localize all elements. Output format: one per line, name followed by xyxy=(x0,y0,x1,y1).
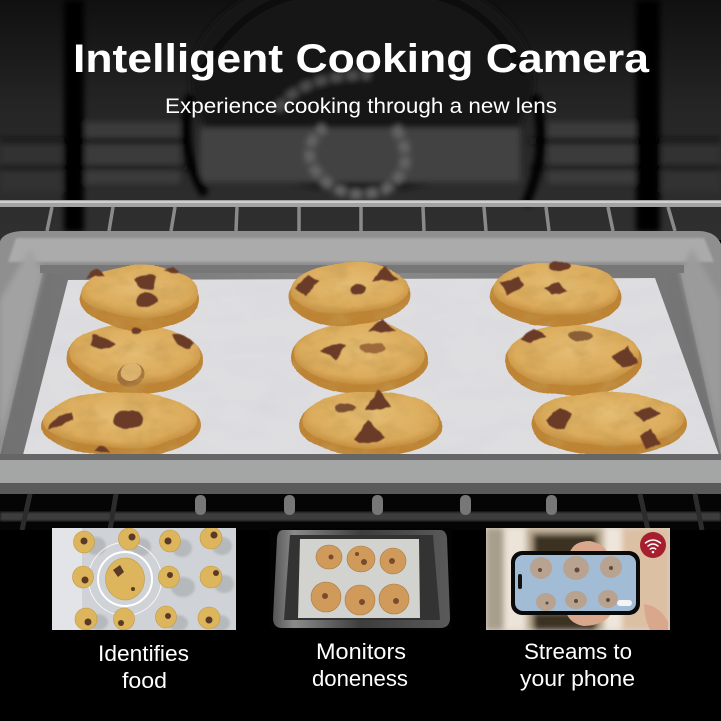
label: identifies food: food xyxy=(122,668,167,693)
label: monitors doneness: doneness xyxy=(312,666,408,691)
cookies: right column xyxy=(490,262,687,456)
chocolate chips xyxy=(48,266,195,452)
oven rack with tines xyxy=(0,200,721,231)
thumbnail: streams to phone xyxy=(486,528,670,630)
oven interior background xyxy=(0,0,721,530)
hands xyxy=(566,541,668,630)
cookies: left column xyxy=(43,266,202,458)
small parchment xyxy=(298,539,420,618)
wifi badge xyxy=(640,532,666,558)
food identification rings xyxy=(88,542,162,616)
chocolate chips xyxy=(500,262,661,450)
label: identifies food xyxy=(98,641,189,693)
cookies: middle column xyxy=(288,263,443,456)
small tray xyxy=(273,530,450,628)
label: monitors doneness: Monitors xyxy=(316,639,406,664)
tray floor xyxy=(0,270,721,456)
tray front lip xyxy=(0,454,721,494)
phone xyxy=(511,551,640,615)
subtitle: Experience cooking through a new lens xyxy=(165,95,557,118)
chocolate chips xyxy=(295,266,399,443)
label: streams to your phone: your phone xyxy=(520,666,635,691)
label: identifies food: Identifies xyxy=(98,641,189,666)
title: Intelligent Cooking Camera xyxy=(73,37,650,81)
label: streams to your phone: Streams to xyxy=(524,639,632,664)
thumbnail: identifies food xyxy=(52,527,236,631)
lower rack xyxy=(0,494,721,721)
parchment paper xyxy=(23,278,719,455)
thumbnail: monitors doneness xyxy=(270,528,452,630)
label: streams to your phone xyxy=(520,639,635,691)
label: monitors doneness xyxy=(312,639,408,691)
baking tray xyxy=(0,231,721,460)
tray rim xyxy=(0,231,721,460)
